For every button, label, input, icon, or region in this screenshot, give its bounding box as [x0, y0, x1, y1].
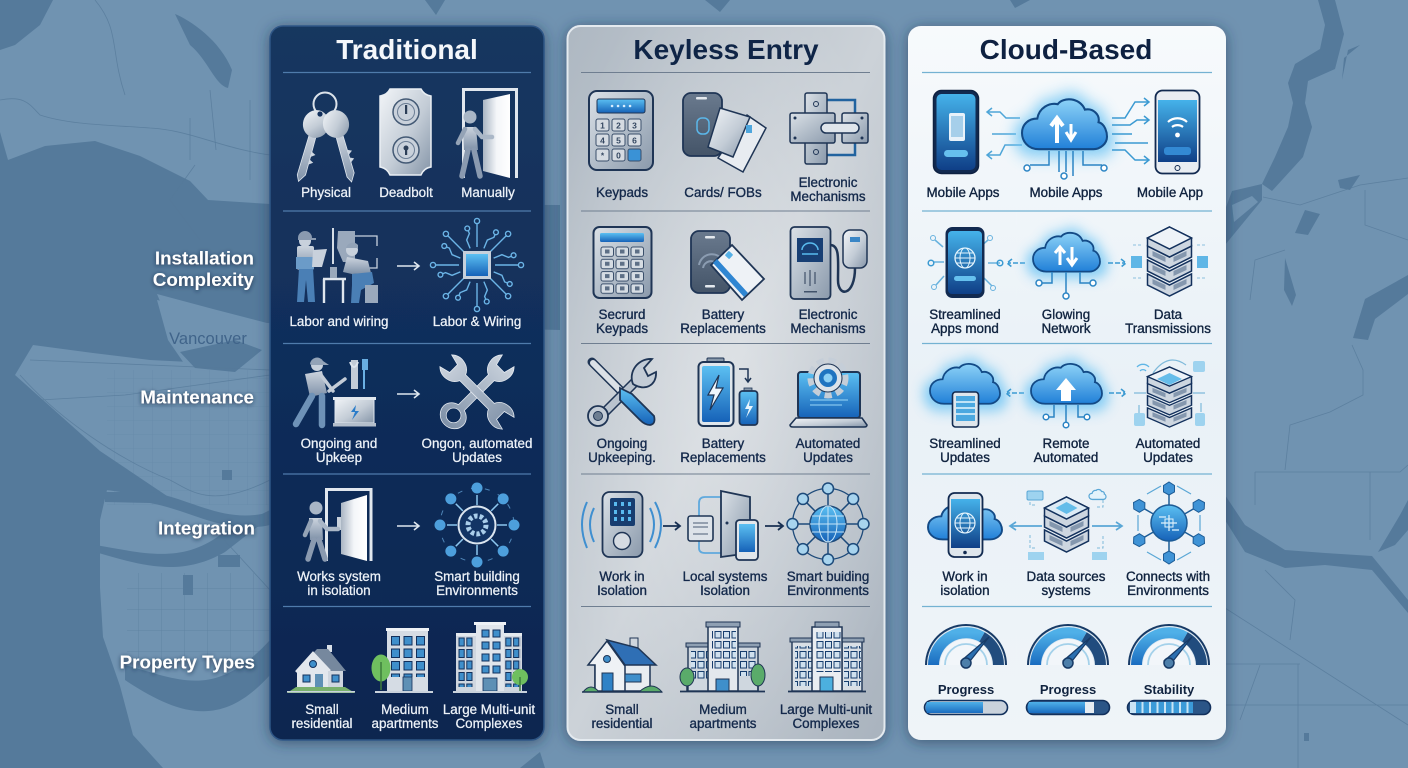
icon: dashed arrow left — [1006, 389, 1024, 397]
icon: medium apartment — [372, 628, 433, 693]
panel: traditional — [270, 26, 544, 740]
label: smart building environments: Environments — [436, 583, 518, 598]
label: work in isolation: Work in — [599, 569, 645, 584]
label: glowing network: Network — [1041, 321, 1091, 336]
label: streamlined updates: Updates — [940, 450, 990, 465]
label: large multi-unit complexes: Large Multi-unit — [780, 702, 872, 717]
icon: data flow arrows right — [1112, 98, 1149, 164]
icon: data sources — [1010, 489, 1122, 560]
label: progress: Progress — [1040, 682, 1096, 697]
label: remote automated: Remote — [1043, 436, 1089, 451]
icon: small house — [287, 645, 355, 693]
icon: keypad: 3 — [632, 120, 637, 130]
icon: keypad: 1 — [600, 120, 605, 130]
label: cards and fobs: Cards/ FOBs — [684, 185, 762, 200]
label: secured keypads: Keypads — [596, 321, 648, 336]
icon: person opening door — [458, 90, 516, 178]
label: streamlined apps mond: Apps mond — [931, 321, 999, 336]
heading: keyless entry: Keyless Entry — [633, 34, 819, 65]
label: connects with environments: Connects with — [1126, 569, 1210, 584]
label: mobile apps: Mobile Apps — [1030, 185, 1103, 200]
label: small residential: Small — [605, 702, 639, 717]
label: mobile apps: Mobile Apps — [927, 185, 1000, 200]
gauge: progress — [925, 624, 1007, 668]
label: large multi-unit complexes: Large Multi-unit — [443, 702, 535, 717]
label: electronic mechanisms: Mechanisms — [790, 189, 866, 204]
icon: remote upload cloud — [1024, 358, 1109, 428]
icon: large complex — [788, 622, 866, 692]
label: medium apartments: Medium — [699, 702, 747, 717]
label: manually: Manually — [461, 185, 515, 200]
icon: keypad: 6 — [632, 136, 637, 146]
icon: circuit chip — [430, 218, 524, 312]
label: local systems isolation: Local systems — [683, 569, 767, 584]
label: property types: Property Types — [120, 652, 255, 672]
label: physical: Physical — [301, 185, 351, 200]
icon: wrench and screwdriver — [588, 359, 656, 426]
label: work in isolation: Work in — [942, 569, 988, 584]
icon: keypad: 4 — [600, 136, 605, 146]
arrow — [397, 262, 419, 270]
label: battery replacements: Replacements — [680, 450, 766, 465]
label: ongoing upkeeping: Upkeeping. — [588, 450, 656, 465]
gauge: stability — [1128, 624, 1210, 668]
label: smart buiding environments: Environments — [787, 583, 869, 598]
icon: phone with globe — [928, 227, 1003, 298]
icon: automated server stack — [1134, 360, 1205, 427]
label: ongon automated updates: Ongon, automated — [422, 436, 532, 451]
label: stability: Stability — [1144, 682, 1195, 697]
label: smart buiding environments: Smart buiding — [787, 569, 869, 584]
label: works system in isolation: in isolation — [307, 583, 371, 598]
map label: Vancouver: Vancouver — [169, 330, 247, 348]
icon: local systems — [688, 491, 758, 560]
label: smart building environments: Smart building — [434, 569, 520, 584]
icon: large multi-unit complex — [453, 622, 528, 693]
icon: keypad — [589, 91, 653, 170]
label: progress: Progress — [938, 682, 994, 697]
label: small residential: residential — [591, 716, 653, 731]
label: streamlined updates: Streamlined — [929, 436, 1001, 451]
label: data transmissions: Data — [1154, 307, 1182, 322]
label: remote automated: Automated — [1034, 450, 1098, 465]
arrow — [397, 522, 419, 530]
label: medium apartments: Medium — [381, 702, 429, 717]
label: small residential: residential — [291, 716, 353, 731]
label: integration: Integration — [158, 518, 255, 538]
label: ongoing upkeeping: Ongoing — [597, 436, 647, 451]
icon: phone and card — [691, 231, 764, 300]
label: automated updates: Updates — [803, 450, 853, 465]
row labels — [120, 248, 255, 672]
label: mobile app: Mobile App — [1137, 185, 1203, 200]
icon: workers wiring — [296, 228, 378, 303]
progress bar — [924, 700, 1008, 714]
icon: battery replacement — [698, 358, 758, 426]
icon: dashed arrow left — [1007, 259, 1025, 267]
stability bar — [1128, 700, 1210, 714]
icon: keypad: 0 — [616, 150, 621, 160]
icon: phone with wifi — [1156, 90, 1200, 174]
icon: server stack — [1131, 227, 1208, 296]
arrow — [663, 522, 680, 530]
icon: crossed wrenches — [435, 351, 518, 434]
label: ongoing and upkeep: Ongoing and — [301, 436, 377, 451]
label: ongoing and upkeep: Upkeep — [316, 450, 362, 465]
label: battery replacements: Battery — [702, 307, 744, 322]
icon: dashed arrow right — [1109, 389, 1126, 397]
icon: cards and fobs — [683, 93, 766, 172]
label: ongon automated updates: Updates — [452, 450, 502, 465]
icon: medium apartments — [680, 622, 765, 692]
label: data sources systems: systems — [1041, 583, 1091, 598]
label: large multi-unit complexes: Complexes — [793, 716, 860, 731]
label: automated updates: Updates — [1143, 450, 1193, 465]
label: deadbolt: Deadbolt — [379, 185, 433, 200]
icon: small house — [582, 638, 662, 692]
heading: traditional: Traditional — [336, 34, 478, 65]
panel: keyless entry — [568, 26, 884, 740]
arrow — [397, 390, 419, 398]
icon: dashed arrow right — [1108, 259, 1126, 267]
label: streamlined apps mond: Streamlined — [929, 307, 1001, 322]
icon: keypad lock with signal — [582, 492, 661, 557]
label: labor and wiring: Labor & Wiring — [433, 314, 521, 329]
icon: person at door — [305, 490, 371, 561]
icon: data flow arrows left — [987, 108, 1022, 159]
label: electronic mechanisms: Electronic — [799, 307, 857, 322]
label: works system in isolation: Works system — [297, 569, 381, 584]
label: secured keypads: Secrurd — [599, 307, 645, 322]
label: local systems isolation: Isolation — [700, 583, 750, 598]
label: electronic mechanisms: Electronic — [799, 175, 857, 190]
icon: electronic panel with fob — [790, 227, 867, 299]
icon: smart building network — [434, 482, 520, 568]
label: installation complexity: Installation — [155, 248, 254, 268]
label: work in isolation: isolation — [940, 583, 990, 598]
label: battery replacements: Battery — [702, 436, 744, 451]
arrow — [765, 522, 783, 530]
icon: keypad: * — [601, 150, 605, 160]
label: small residential: Small — [305, 702, 339, 717]
label: large multi-unit complexes: Complexes — [456, 716, 523, 731]
icon: mobile phone — [934, 90, 978, 174]
icon: secured keypad — [594, 227, 652, 298]
gauge: progress — [1027, 624, 1109, 668]
label: maintenance: Maintenance — [140, 386, 254, 408]
icon: electronic lock mechanism — [790, 93, 868, 164]
progress bar — [1026, 700, 1110, 714]
icon: maintenance worker and battery — [296, 358, 376, 426]
icon: laptop with gear — [790, 361, 867, 427]
icon: glowing cloud — [1014, 93, 1115, 179]
label: labor and wiring: Labor and wiring — [289, 314, 389, 329]
icon: keypad: 5 — [616, 136, 621, 146]
label: data sources systems: Data sources — [1027, 569, 1105, 584]
label: battery replacements: Replacements — [680, 321, 766, 336]
label: medium apartments: apartments — [372, 716, 439, 731]
icon: phone on cloud — [928, 493, 1002, 557]
label: data transmissions: Transmissions — [1125, 321, 1211, 336]
label: automated updates: Automated — [796, 436, 860, 451]
heading: cloud-based: Cloud-Based — [980, 34, 1152, 65]
icon: deadbolt — [380, 89, 431, 175]
icon: cloud with tablet — [923, 358, 1008, 427]
label: electronic mechanisms: Mechanisms — [790, 321, 866, 336]
label: connects with environments: Environments — [1127, 583, 1209, 598]
label: medium apartments: apartments — [690, 716, 757, 731]
label: glowing network: Glowing — [1042, 307, 1090, 322]
icon: globe network — [787, 483, 869, 565]
icon: connected network — [1131, 482, 1207, 564]
icon: keys — [287, 92, 365, 185]
label: installation complexity: Complexity — [153, 269, 255, 290]
panel: cloud-based — [908, 26, 1226, 740]
label: automated updates: Automated — [1136, 436, 1200, 451]
label: work in isolation: Isolation — [597, 583, 647, 598]
label: keypads: Keypads — [596, 185, 648, 200]
icon: keypad: 2 — [616, 120, 621, 130]
icon: network cloud — [1026, 228, 1108, 299]
